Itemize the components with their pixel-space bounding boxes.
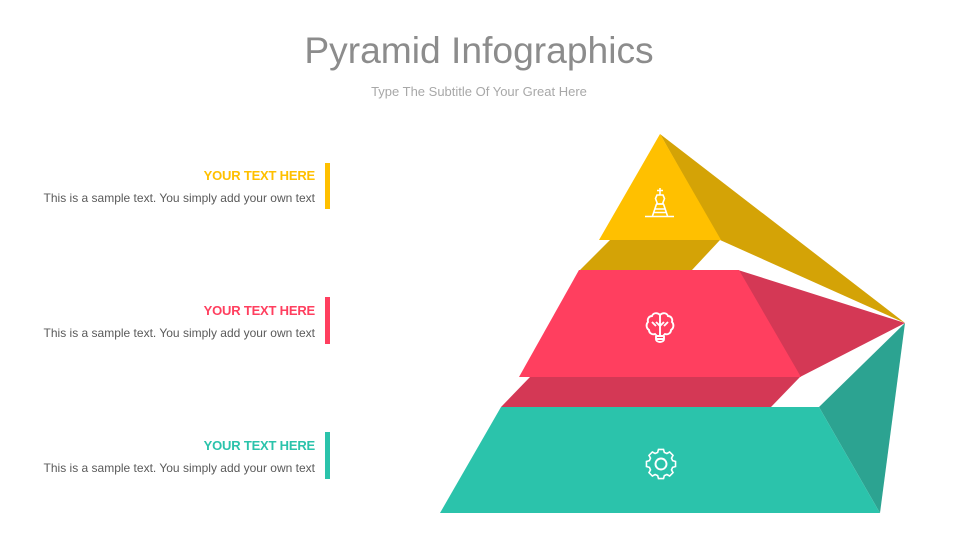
icon: chess king bbox=[645, 188, 674, 216]
pyramid tier: red bbox=[501, 270, 905, 407]
pyramid tier: teal bbox=[440, 323, 905, 513]
text block: yellow bbox=[44, 163, 330, 209]
heading: yellow: YOUR TEXT HERE bbox=[204, 168, 315, 183]
pyramid tier: yellow bbox=[580, 134, 905, 323]
icon: brain bulb bbox=[647, 313, 673, 342]
title: Pyramid Infographics bbox=[304, 29, 654, 71]
heading: red: YOUR TEXT HERE bbox=[204, 303, 315, 318]
description: yellow: This is a sample text. You simply add your own text bbox=[44, 191, 315, 205]
subtitle: Type The Subtitle Of Your Great Here bbox=[371, 84, 587, 99]
accent bar: teal bbox=[325, 432, 330, 479]
icon: gear bbox=[646, 449, 676, 479]
text block: red bbox=[44, 297, 330, 344]
accent bar: red bbox=[325, 297, 330, 344]
text block: teal bbox=[44, 432, 330, 479]
description: teal: This is a sample text. You simply add your own text bbox=[44, 461, 315, 475]
description: red: This is a sample text. You simply add your own text bbox=[44, 326, 315, 340]
heading: teal: YOUR TEXT HERE bbox=[204, 438, 315, 453]
accent bar: yellow bbox=[325, 163, 330, 209]
